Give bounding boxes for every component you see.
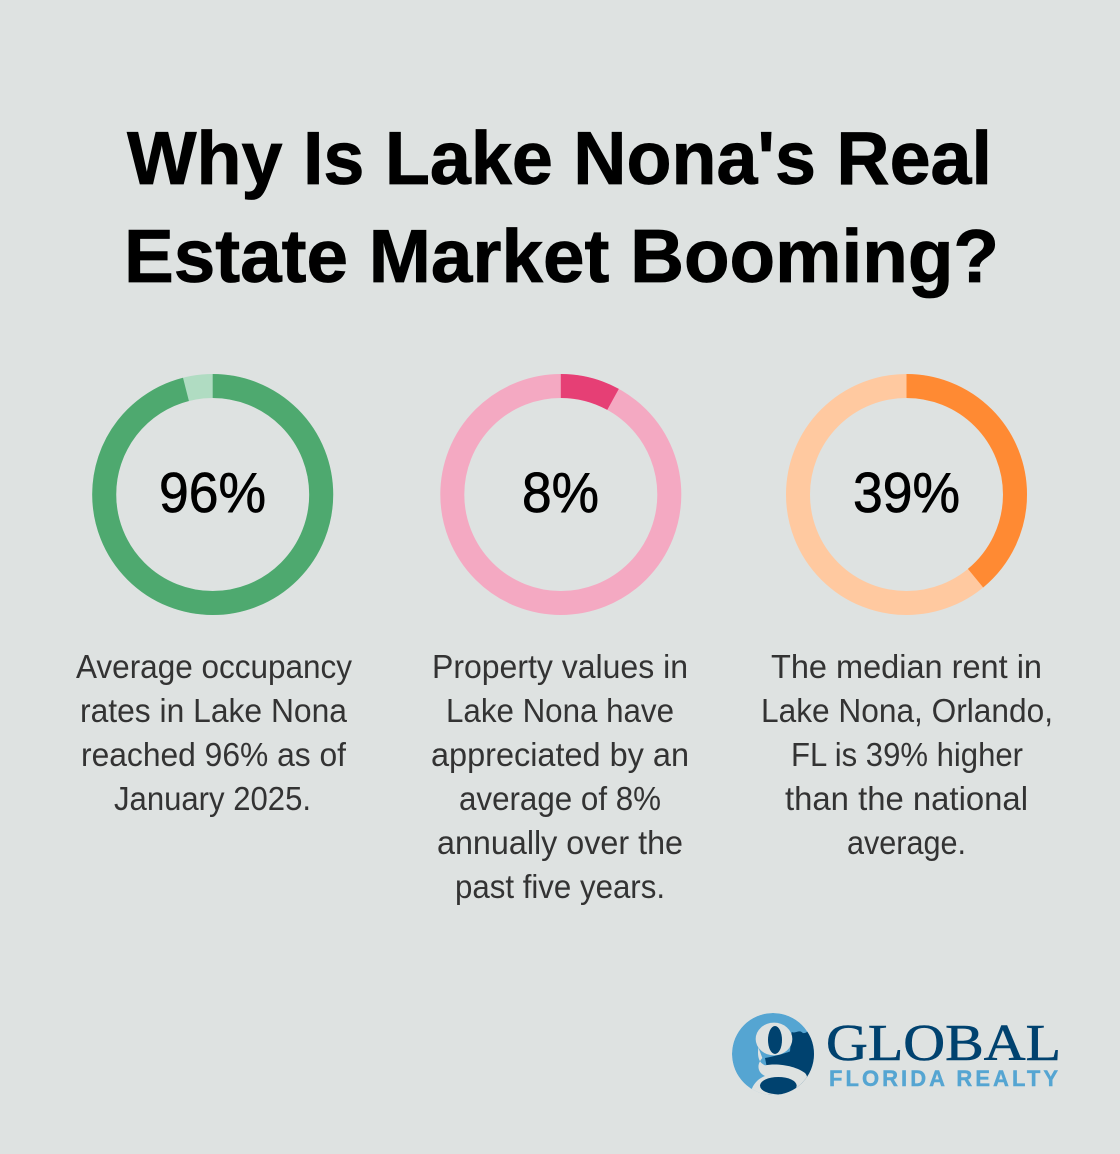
text: median rent description: The median rent in [771,648,1042,685]
panel: occupancy [76,386,352,817]
panel: property values [431,386,689,905]
text: property values description: Lake Nona have [446,692,674,729]
stat: 96%: 96% [159,461,266,525]
logo: Global Florida Realty [732,1013,1061,1101]
text: property values description: past five years. [455,868,665,905]
text: median rent description: FL is 39% higher [791,736,1023,773]
text: median rent description: than the national [785,780,1028,817]
title: Why Is Lake Nona's Real [127,116,992,200]
text: property values description: annually over the [437,824,683,861]
donut chart: 8% [452,386,669,603]
text: property values description: Property values in [432,648,688,685]
text: occupancy description: Average occupancy [76,648,352,685]
text: median rent description: Lake Nona, Orlando, [761,692,1053,729]
text: occupancy description: rates in Lake Nona [80,692,348,729]
panel: median rent [761,386,1053,861]
text: median rent description: average. [847,824,966,861]
stat: 39%: 39% [853,461,960,525]
text: property values description [431,648,689,905]
text: occupancy description: reached 96% as of [81,736,347,773]
title: Estate Market Booming? [124,214,999,298]
text: occupancy description [76,648,352,817]
stat: 8%: 8% [522,461,599,525]
title [124,116,999,298]
donut chart: 96% [104,386,321,603]
text: property values description: average of 8% [459,780,661,817]
text: occupancy description: January 2025. [114,780,311,817]
donut chart: 39% [798,386,1015,603]
icon: g monogram [732,1013,814,1095]
text: median rent description [761,648,1053,861]
wordmark: FLORIDA REALTY: FLORIDA REALTY [829,1066,1058,1091]
wordmark: GLOBAL: GLOBAL [826,1015,1061,1072]
text: property values description: appreciated by an [431,736,689,773]
